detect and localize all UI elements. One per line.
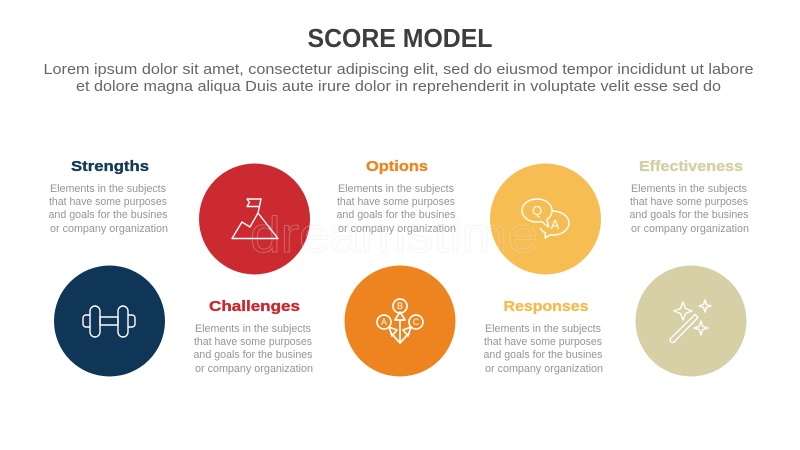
- icon: Q and A speech bubbles: A: [551, 217, 560, 232]
- text block: strengths: or company organization: [50, 223, 168, 235]
- icon: three arrows to A B C: [377, 299, 423, 343]
- text block: strengths: Elements in the subjects: [50, 183, 166, 195]
- subtitle text block: et dolore magna aliqua Duis aute irure dolor in reprehenderit in voluptate velit esse sed do: [76, 78, 721, 95]
- subtitle text block: [44, 61, 754, 95]
- text block: effectiveness: or company organization: [631, 223, 749, 235]
- text block: responses: and goals for the busines: [484, 349, 603, 361]
- panel: options text: [336, 158, 456, 235]
- text block: effectiveness: [630, 183, 749, 235]
- text block: responses: or company organization: [485, 363, 603, 375]
- icon: three arrows to A B C: C: [413, 317, 420, 327]
- panel: strengths text: [48, 158, 168, 235]
- icon: Q and A speech bubbles: Q: [532, 203, 542, 218]
- text block: options: that have some purposes: [337, 196, 455, 208]
- panel: responses text: [484, 298, 603, 375]
- text block: challenges: and goals for the busines: [194, 349, 313, 361]
- khaki circle with magic wand icon: [636, 266, 746, 376]
- text block: challenges: that have some purposes: [194, 336, 312, 348]
- text block: challenges: Elements in the subjects: [195, 323, 311, 335]
- text block: effectiveness: that have some purposes: [630, 196, 748, 208]
- heading: strengths: Strengths: [71, 158, 149, 175]
- icon: mountain with flag: [232, 199, 278, 238]
- panel: effectiveness text: [630, 158, 749, 235]
- text block: challenges: [194, 323, 313, 375]
- text block: responses: that have some purposes: [484, 336, 602, 348]
- icon: three arrows to A B C: A: [381, 317, 387, 327]
- heading: responses: Responses: [504, 298, 588, 315]
- panel: challenges text: [194, 298, 313, 375]
- text block: strengths: that have some purposes: [49, 196, 167, 208]
- subtitle text block: Lorem ipsum dolor sit amet, consectetur adipiscing elit, sed do eiusmod tempor incididunt ut labore: [44, 61, 754, 78]
- heading: options: Options: [366, 158, 428, 175]
- title: SCORE MODEL: [308, 23, 493, 53]
- text block: options: Elements in the subjects: [338, 183, 454, 195]
- yellow circle with Q and A icon: [490, 164, 601, 274]
- icon: dumbbell: [83, 306, 135, 337]
- text block: effectiveness: Elements in the subjects: [631, 183, 747, 195]
- navy circle with dumbbell icon: [54, 266, 165, 376]
- red circle with mountain flag icon: [199, 164, 310, 274]
- heading: effectiveness: Effectiveness: [639, 158, 743, 175]
- text block: options: or company organization: [338, 223, 456, 235]
- text block: challenges: or company organization: [195, 363, 313, 375]
- text block: options: and goals for the busines: [336, 209, 456, 221]
- orange circle with options icon: [344, 266, 456, 376]
- text block: responses: [484, 323, 603, 375]
- icon: Q and A speech bubbles: [522, 199, 569, 238]
- text block: responses: Elements in the subjects: [485, 323, 601, 335]
- text block: strengths: and goals for the busines: [48, 209, 168, 221]
- text block: effectiveness: and goals for the busines: [630, 209, 749, 221]
- watermark: dreamstime: [250, 207, 538, 263]
- icon: three arrows to A B C: B: [397, 301, 403, 311]
- text block: strengths: [48, 183, 168, 235]
- heading: challenges: Challenges: [209, 298, 300, 315]
- icon: magic wand with sparkles: [670, 300, 711, 342]
- text block: options: [336, 183, 456, 235]
